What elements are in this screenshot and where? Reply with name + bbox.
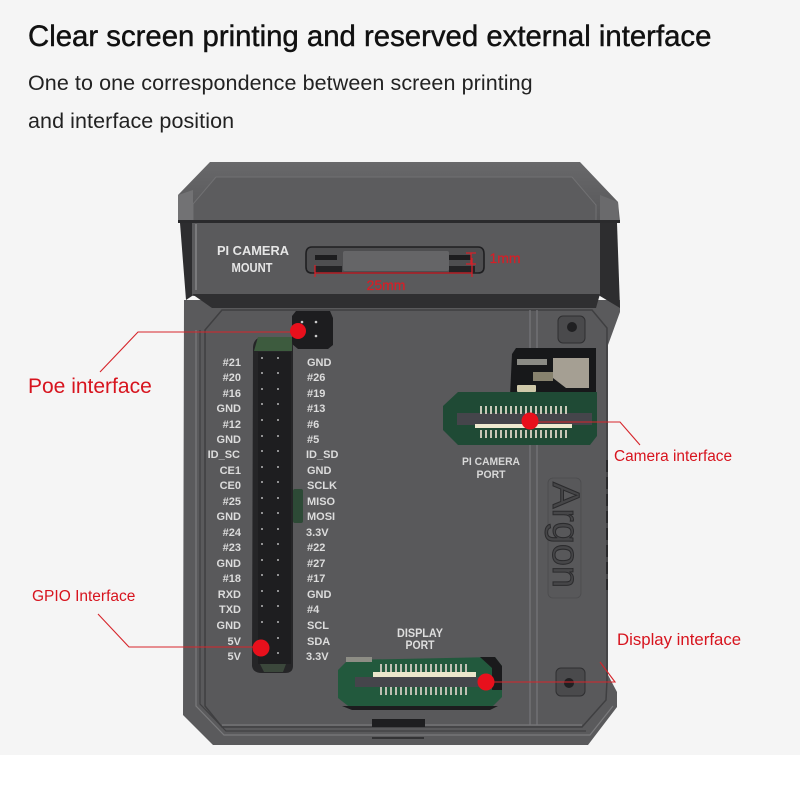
argon logo: Argon: [544, 482, 586, 588]
gpio left labels: 5V: [228, 651, 242, 663]
gpio left labels: 5V: [228, 636, 242, 648]
gpio right labels: GND: [307, 357, 332, 369]
hood: camera mount: [178, 162, 620, 308]
gpio right labels: SCL: [307, 620, 329, 632]
display port label: [397, 628, 443, 652]
gpio right labels: MISO: [307, 496, 336, 508]
gpio right labels: #4: [307, 604, 320, 616]
gpio header: [252, 337, 303, 673]
gpio left labels: [208, 357, 242, 663]
gpio left labels: GND: [217, 434, 241, 446]
gpio left labels: #23: [223, 542, 241, 554]
gpio right labels: GND: [307, 465, 332, 477]
gpio left labels: #16: [223, 388, 241, 400]
gpio right labels: MOSI: [307, 511, 335, 523]
gpio left labels: GND: [217, 511, 241, 523]
camera port label: PI CAMERA: [462, 456, 520, 468]
gpio left labels: #18: [223, 573, 241, 585]
display port label: DISPLAY: [397, 628, 443, 640]
gpio left labels: #12: [223, 419, 241, 431]
camera port label: PORT: [476, 469, 506, 481]
gpio left labels: ID_SC: [208, 449, 240, 461]
subtitle: [28, 71, 533, 132]
gpio left labels: GND: [217, 620, 241, 632]
gpio left labels: #25: [223, 496, 241, 508]
display port: [338, 657, 502, 710]
gpio right labels: #27: [307, 558, 325, 570]
gpio right labels: #19: [307, 388, 325, 400]
mount label: MOUNT: [232, 260, 273, 275]
poe header: [292, 311, 333, 349]
screw mounts: [556, 316, 585, 696]
label: gpio interface: GPIO Interface: [32, 588, 135, 605]
title: Clear screen printing and reserved external interface: [28, 20, 711, 53]
gpio right labels: [306, 357, 338, 663]
case body: [183, 300, 620, 745]
gpio right labels: SCLK: [307, 480, 337, 492]
gpio right labels: #26: [307, 372, 325, 384]
subtitle: and interface position: [28, 108, 234, 132]
camera port label: [462, 456, 520, 481]
gpio right labels: #13: [307, 403, 325, 415]
gpio right labels: ID_SD: [306, 449, 338, 461]
gpio left labels: CE1: [220, 465, 241, 477]
callout dots: [252, 323, 538, 690]
label: poe interface: Poe interface: [28, 375, 152, 398]
gpio right labels: GND: [307, 589, 332, 601]
gpio left labels: GND: [217, 558, 241, 570]
gpio right labels: #6: [307, 419, 319, 431]
subtitle: One to one correspondence between screen printing: [28, 71, 533, 95]
callout lines: [98, 332, 640, 682]
gpio right labels: 3.3V: [306, 651, 329, 663]
gpio left labels: #20: [223, 372, 241, 384]
label: camera interface: Camera interface: [614, 448, 732, 465]
gpio left labels: CE0: [220, 480, 241, 492]
gpio left labels: GND: [217, 403, 241, 415]
gpio left labels: RXD: [218, 589, 241, 601]
gpio right labels: 3.3V: [306, 527, 329, 539]
dimension marks: 25mm: [367, 277, 405, 293]
gpio right labels: SDA: [307, 636, 330, 648]
dimension marks: [315, 250, 521, 293]
display port label: PORT: [406, 640, 434, 652]
dimension marks: 1mm: [489, 250, 521, 266]
camera module: [510, 348, 596, 396]
gpio right labels: #22: [307, 542, 325, 554]
gpio left labels: #24: [223, 527, 242, 539]
gpio left labels: #21: [223, 357, 241, 369]
mount label: [217, 243, 290, 275]
gpio right labels: #17: [307, 573, 325, 585]
gpio left labels: TXD: [219, 604, 241, 616]
gpio right labels: #5: [307, 434, 319, 446]
mount slot: [306, 247, 484, 273]
camera port: [443, 392, 597, 445]
mount label: PI CAMERA: [217, 243, 290, 258]
label: display interface: Display interface: [617, 630, 741, 649]
